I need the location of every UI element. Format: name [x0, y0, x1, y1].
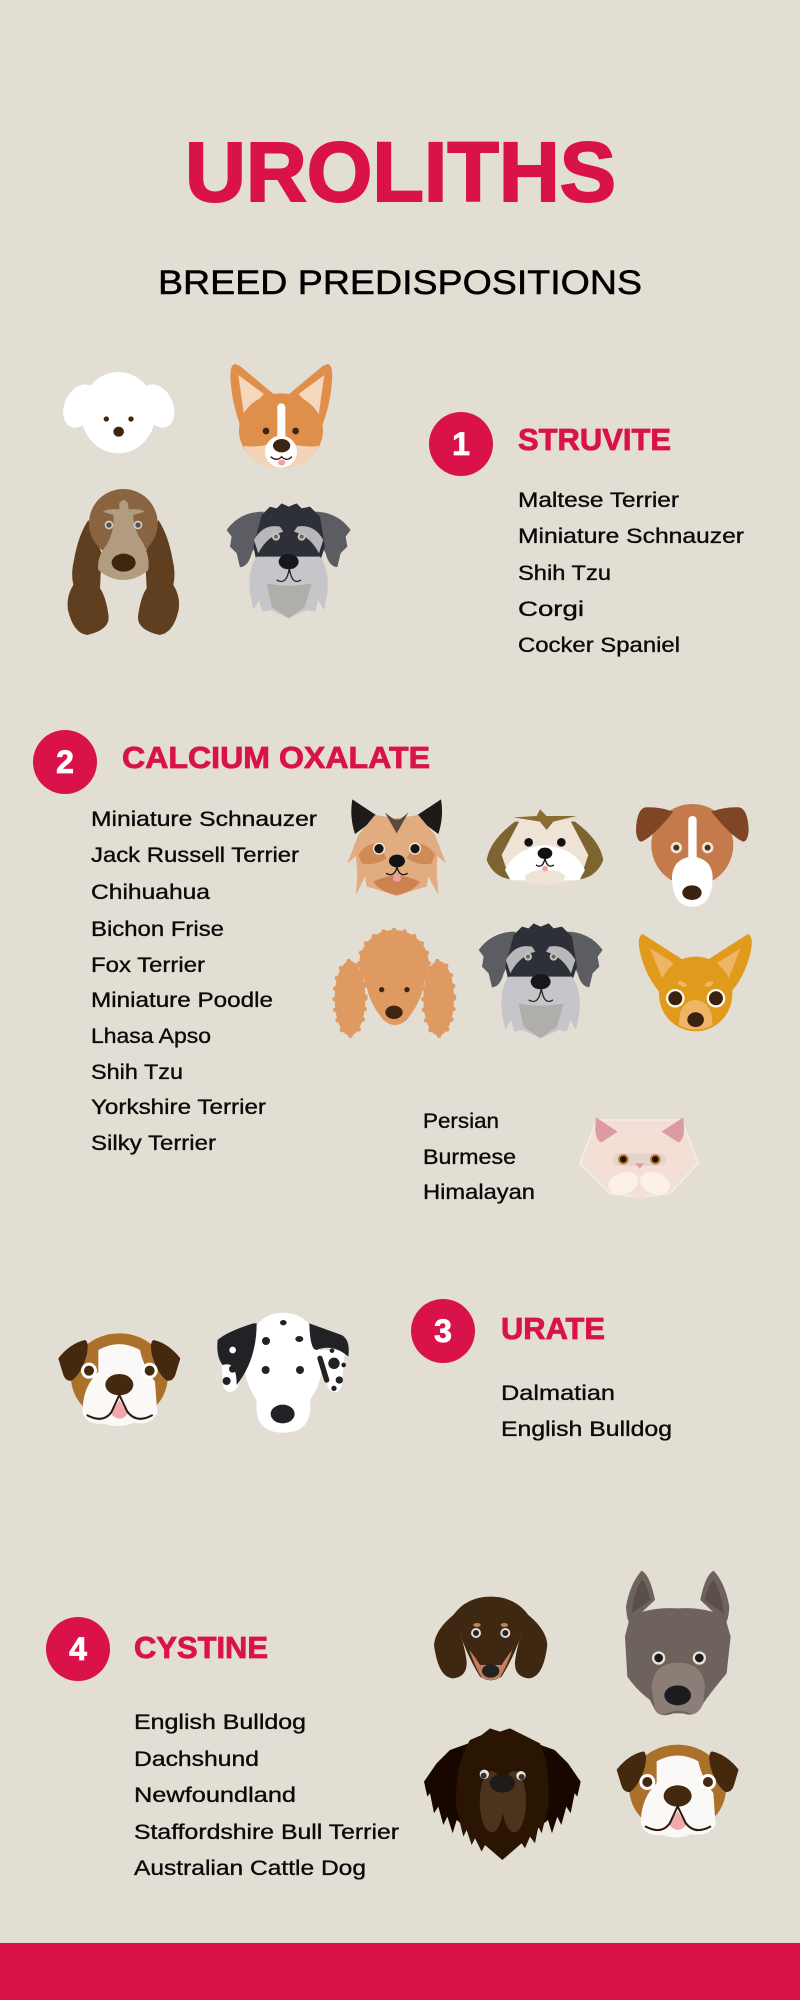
struvite breed list: Maltese Terrier: [518, 489, 679, 512]
cystine breed list: Staffordshire Bull Terrier: [134, 1821, 399, 1844]
panel: cystine text: [46, 1617, 399, 1880]
panel: calcium oxalate text: [33, 730, 535, 1204]
number badge 1: 1: [452, 426, 470, 462]
number badge 1: [429, 412, 493, 476]
heading: cystine: CYSTINE: [134, 1630, 268, 1665]
heading: urate: URATE: [501, 1311, 605, 1346]
calcium oxalate breed list: Chihuahua: [91, 881, 210, 904]
number badge 3: [411, 1299, 475, 1363]
urate breed list: Dalmatian: [501, 1382, 615, 1405]
icon: cocker spaniel dog: [68, 489, 179, 635]
cystine breed list: [134, 1711, 399, 1880]
calcium oxalate breed list: Silky Terrier: [91, 1132, 216, 1155]
icon: persian cat: [580, 1117, 698, 1199]
icon: miniature poodle dog: [335, 930, 454, 1036]
calcium oxalate breed list: Fox Terrier: [91, 954, 205, 977]
cystine breed list: Dachshund: [134, 1748, 259, 1771]
panel: struvite text: [429, 412, 744, 657]
icon: english bulldog: [58, 1333, 180, 1426]
cat breed list: Persian: [423, 1110, 499, 1133]
struvite breed list: Cocker Spaniel: [518, 634, 680, 657]
number badge 4: 4: [69, 1631, 87, 1667]
struvite breed list: Miniature Schnauzer: [518, 525, 744, 548]
icon: yorkshire terrier dog: [347, 799, 446, 896]
struvite breed list: [518, 489, 744, 657]
number badge 2: [33, 730, 97, 794]
icon: miniature schnauzer dog: [227, 503, 351, 618]
heading: calcium oxalate: CALCIUM OXALATE: [122, 740, 430, 775]
icon: newfoundland dog: [424, 1728, 581, 1860]
calcium oxalate breed list: Jack Russell Terrier: [91, 844, 299, 867]
number badge 3: 3: [434, 1313, 452, 1349]
subtitle: BREED PREDISPOSITIONS: [158, 264, 642, 302]
heading: struvite: STRUVITE: [518, 422, 671, 457]
cystine breed list: Australian Cattle Dog: [134, 1857, 366, 1880]
icon: staffordshire bull terrier dog: [625, 1571, 731, 1715]
icon: shih tzu dog: [487, 809, 603, 885]
cat breed list: Himalayan: [423, 1181, 535, 1204]
icon: maltese dog: [57, 372, 181, 453]
calcium oxalate breed list: Miniature Schnauzer: [91, 808, 317, 831]
calcium oxalate breed list: Shih Tzu: [91, 1061, 183, 1084]
calcium oxalate breed list: Miniature Poodle: [91, 989, 273, 1012]
urate breed list: [501, 1382, 672, 1441]
cat breed list: Burmese: [423, 1146, 516, 1169]
icon: corgi dog: [230, 364, 332, 468]
title: UROLITHS: [185, 125, 616, 219]
icon: jack russell terrier dog: [636, 804, 749, 907]
struvite breed list: Shih Tzu: [518, 562, 611, 585]
panel: urate text: [411, 1299, 672, 1441]
calcium oxalate breed list: Yorkshire Terrier: [91, 1096, 266, 1119]
urate breed list: English Bulldog: [501, 1418, 672, 1441]
icon: dachshund dog: [434, 1597, 547, 1680]
calcium oxalate breed list: Bichon Frise: [91, 918, 224, 941]
calcium oxalate breed list: [91, 808, 317, 1155]
cystine breed list: English Bulldog: [134, 1711, 306, 1734]
icon: chihuahua dog: [639, 934, 752, 1031]
icon: english bulldog, second copy: [617, 1745, 739, 1837]
struvite breed list: Corgi: [518, 598, 584, 621]
cat breed list: [423, 1110, 535, 1204]
footer bar: [0, 1943, 800, 2000]
number badge 2: 2: [56, 744, 74, 780]
icon: miniature schnauzer dog, second copy: [479, 923, 603, 1038]
icon: dalmatian dog: [217, 1313, 349, 1433]
calcium oxalate breed list: Lhasa Apso: [91, 1025, 211, 1048]
number badge 4: [46, 1617, 110, 1681]
cystine breed list: Newfoundland: [134, 1784, 296, 1807]
